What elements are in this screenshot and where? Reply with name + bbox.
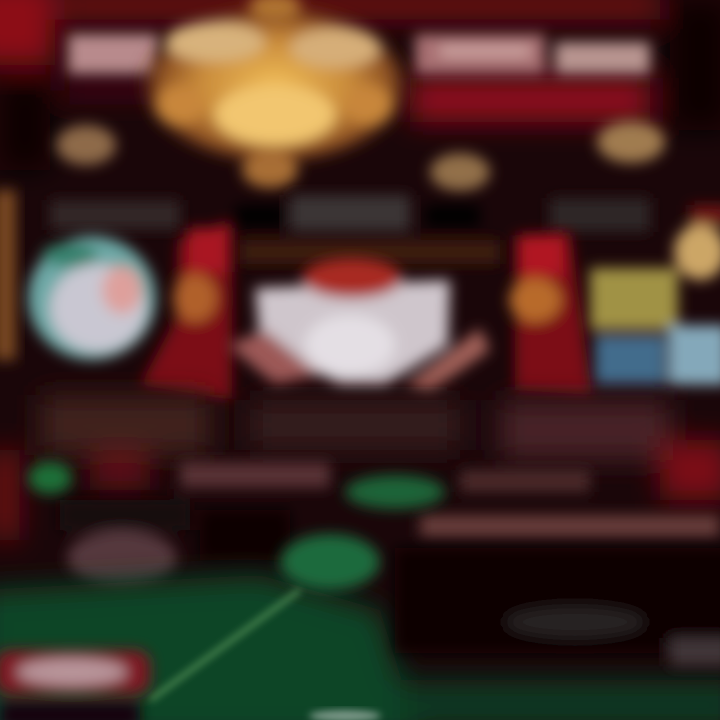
green highlights (28, 462, 445, 590)
red figure: left (140, 220, 232, 400)
back wall band (50, 195, 650, 264)
central white display (228, 258, 490, 392)
bottom highlight (309, 710, 381, 720)
right panels (590, 205, 720, 385)
green floor (0, 575, 720, 720)
banner: blurred sign lettering (68, 34, 650, 74)
gaming tables (60, 462, 720, 586)
ceiling: red drapery (0, 0, 720, 170)
lower tables: dark red (0, 395, 720, 540)
left column (0, 190, 16, 360)
bottom-left chips (0, 650, 150, 720)
chandelier (137, 0, 413, 188)
left round display (28, 236, 156, 360)
felt line (150, 590, 300, 700)
dark table: right (395, 548, 720, 666)
ceiling lights (56, 121, 665, 191)
red figure: right (509, 232, 592, 395)
